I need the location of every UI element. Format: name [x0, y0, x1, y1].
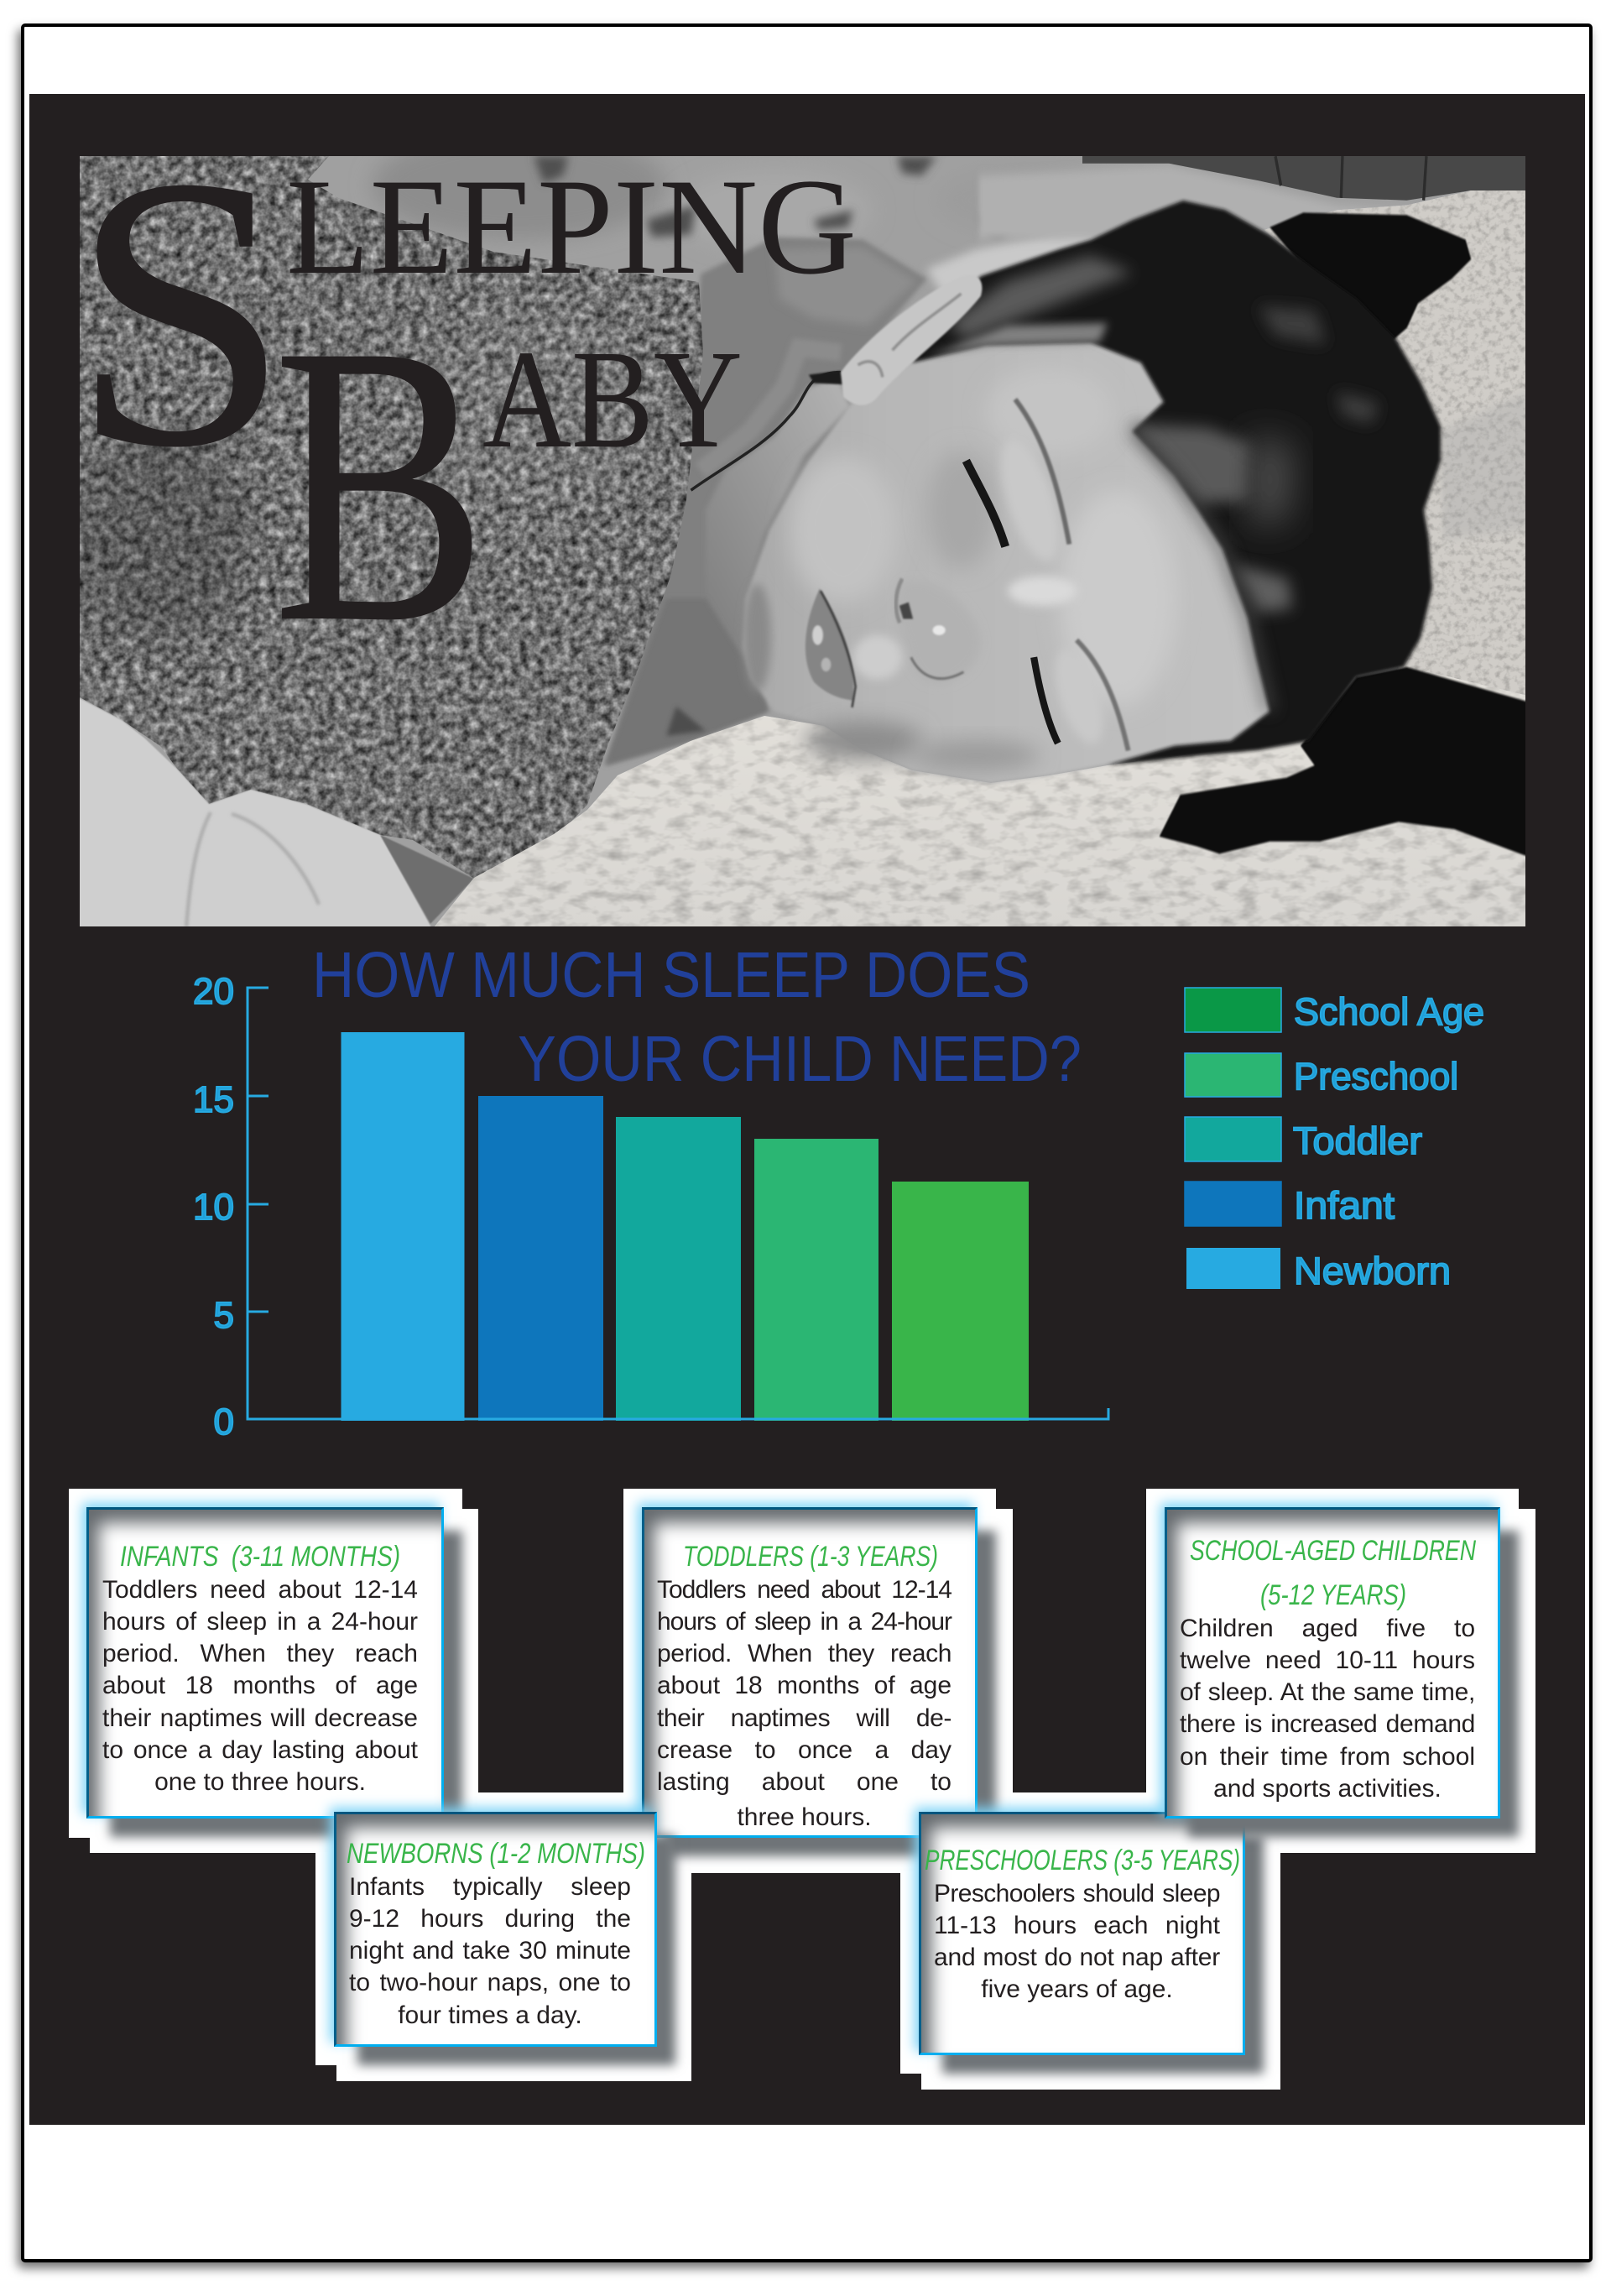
body text: toddlers: Toddlers need about 12-14 — [657, 1576, 951, 1603]
body text: school-aged children: Children aged five to — [1180, 1615, 1475, 1641]
knit blanket — [80, 156, 703, 879]
photo and title — [80, 156, 1525, 926]
legend: Newborn — [1294, 1250, 1451, 1292]
title — [70, 97, 857, 706]
lower-left sleeve — [78, 697, 474, 929]
nose — [897, 581, 981, 685]
axis labels: 5 — [214, 1295, 234, 1336]
body text: school-aged children: of sleep. At the same time, — [1180, 1678, 1475, 1706]
hair highlights — [927, 256, 1379, 712]
face — [743, 342, 1270, 783]
legend: Toddler — [1293, 1119, 1422, 1162]
axes — [248, 988, 1108, 1419]
heading: toddlers: TODDLERS (1-3 YEARS) — [683, 1541, 938, 1573]
heading: school-aged children: SCHOOL-AGED CHILDREN — [1190, 1535, 1476, 1567]
card: toddlers — [628, 1494, 1004, 1865]
card: preschoolers — [905, 1798, 1272, 2081]
body text: preschoolers: Preschoolers should sleep — [934, 1880, 1220, 1907]
body text: toddlers — [657, 1576, 951, 1831]
axis labels: 10 — [193, 1187, 234, 1228]
body text: preschoolers: 11-13 hours each night — [934, 1912, 1220, 1939]
facial features — [743, 275, 1177, 770]
body text: school-aged children: twelve need 10-11 hours — [1180, 1646, 1475, 1674]
body text: toddlers: hours of sleep in a 24-hour — [657, 1608, 951, 1636]
body text: toddlers: lasting about one to — [657, 1768, 951, 1796]
closed eye lower — [1034, 657, 1058, 744]
skin shading — [1062, 495, 1171, 702]
body text: infants: period. When they reach — [102, 1640, 418, 1667]
bars — [341, 1032, 1029, 1421]
title: LEEPING: LEEPING — [286, 151, 857, 303]
legend: Infant — [1294, 1184, 1395, 1227]
body text: toddlers: their naptimes will de- — [657, 1704, 951, 1732]
title: letter B: B — [273, 263, 487, 706]
body text: infants: about 18 months of age — [102, 1672, 418, 1699]
body text: newborns: four times a day. — [398, 2001, 582, 2029]
body text: school-aged children: there is increased demand — [1180, 1710, 1475, 1738]
body text: infants: their naptimes will decrease — [102, 1704, 418, 1732]
ear — [841, 275, 982, 405]
photo: sleeping child — [67, 132, 1531, 931]
axis labels: 15 — [193, 1079, 234, 1120]
body text: newborns: to two-hour naps, one to — [349, 1969, 631, 1996]
body text: preschoolers — [934, 1880, 1220, 2003]
closed eye upper — [966, 461, 1005, 546]
title: letter S: S — [70, 97, 290, 528]
chart heading — [312, 939, 1082, 1095]
body text: newborns — [349, 1873, 631, 2029]
heading: newborns: NEWBORNS (1-2 MONTHS) — [347, 1838, 645, 1870]
hair — [912, 201, 1441, 765]
card: infants — [73, 1494, 470, 1845]
card: newborns — [321, 1798, 683, 2073]
body text: infants: to once a day lasting about — [102, 1736, 418, 1764]
body text: infants: Toddlers need about 12-14 — [102, 1576, 418, 1603]
heading: school-aged children: (5-12 YEARS) — [1260, 1579, 1406, 1611]
lips — [806, 588, 853, 701]
title: ABY: ABY — [482, 321, 743, 477]
black toy body — [1160, 667, 1527, 856]
axis labels: 0 — [214, 1401, 234, 1443]
axis labels: 20 — [193, 971, 234, 1012]
body text: newborns: 9-12 hours during the — [349, 1905, 631, 1933]
shirt behind the head — [372, 132, 1133, 294]
body text: toddlers: crease to once a day — [657, 1736, 951, 1764]
heading: preschoolers: PRESCHOOLERS (3-5 YEARS) — [925, 1845, 1240, 1876]
body text: school-aged children: on their time from school — [1180, 1742, 1475, 1771]
legend: Preschool — [1294, 1055, 1458, 1098]
body text: newborns: night and take 30 minute — [349, 1937, 631, 1965]
chart heading: YOUR CHILD NEED? — [518, 1023, 1082, 1095]
clothing at the neck — [605, 237, 927, 765]
body text: infants: hours of sleep in a 24-hour — [102, 1608, 418, 1636]
heading: school-aged children — [1190, 1535, 1476, 1611]
body text: toddlers: period. When they reach — [657, 1640, 951, 1667]
legend — [1185, 988, 1484, 1292]
body text: preschoolers: five years of age. — [981, 1975, 1173, 2003]
axis labels — [193, 971, 234, 1443]
body text: preschoolers: and most do not nap after — [934, 1944, 1220, 1971]
bottom fleece — [430, 671, 1531, 931]
upper right fleece — [1264, 190, 1527, 702]
body text: newborns: Infants typically sleep — [349, 1873, 631, 1900]
legend: School Age — [1294, 990, 1484, 1033]
top right pillow and stripes — [979, 151, 1527, 702]
body text: toddlers: about 18 months of age — [657, 1672, 951, 1699]
body text: school-aged children — [1180, 1615, 1475, 1803]
body text: infants — [102, 1576, 418, 1796]
black toy ear — [1270, 212, 1471, 341]
body text: school-aged children: and sports activities. — [1213, 1775, 1442, 1803]
heading: infants: INFANTS (3-11 MONTHS) — [120, 1541, 400, 1573]
chart heading: HOW MUCH SLEEP DOES — [312, 939, 1030, 1011]
body text: infants: one to three hours. — [154, 1768, 366, 1796]
card: school-aged children — [1151, 1494, 1527, 1845]
body text: toddlers: three hours. — [737, 1803, 872, 1831]
